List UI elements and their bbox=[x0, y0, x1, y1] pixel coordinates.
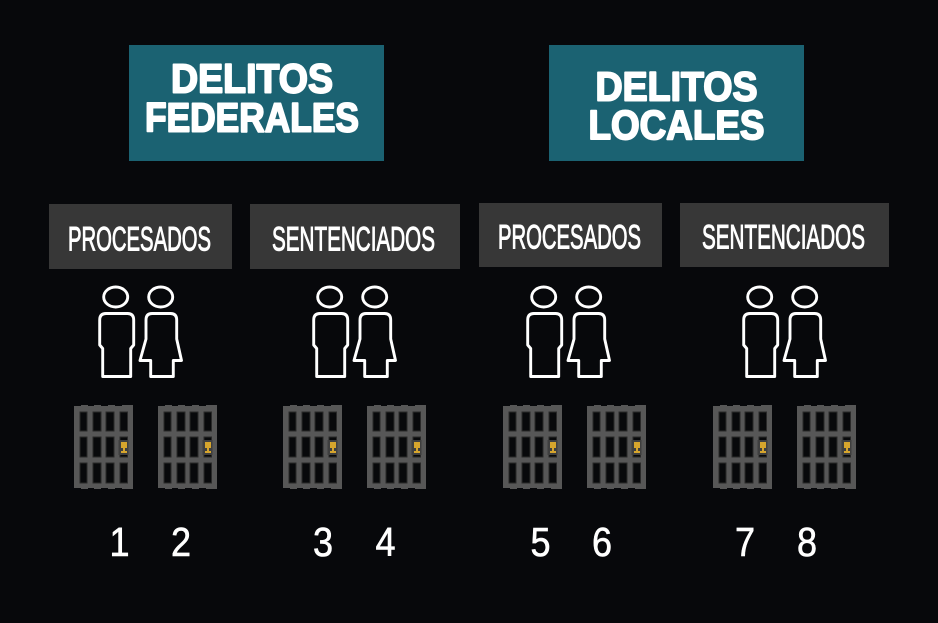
icon: cell door 5 bbox=[503, 405, 562, 489]
number 3: 3 bbox=[313, 520, 333, 566]
number 2: 2 bbox=[171, 520, 191, 566]
label: sentenciados federales: SENTENCIADOS bbox=[272, 220, 435, 258]
icon: cell door 1 bbox=[74, 405, 133, 489]
heading: delitos federales bbox=[129, 45, 384, 161]
icon: man and woman, group 3 bbox=[528, 287, 610, 376]
label: procesados locales bbox=[479, 203, 662, 267]
label: procesados federales: PROCESADOS bbox=[68, 220, 211, 258]
icon: cell door 8 bbox=[797, 405, 856, 489]
icon: cell door 6 bbox=[587, 405, 646, 489]
label: sentenciados locales bbox=[680, 203, 889, 267]
icon: man and woman, group 1 bbox=[100, 287, 182, 376]
icon: cell door 2 bbox=[158, 405, 217, 489]
icon: cell door 7 bbox=[713, 405, 772, 489]
icon: cell door 4 bbox=[367, 405, 426, 489]
icon: cell door 3 bbox=[283, 405, 342, 489]
heading: delitos locales: DELITOS bbox=[596, 64, 758, 110]
number 8: 8 bbox=[797, 520, 817, 566]
number 7: 7 bbox=[735, 520, 755, 566]
label: procesados locales: PROCESADOS bbox=[498, 218, 641, 256]
icon: man and woman, group 2 bbox=[314, 287, 396, 376]
number 1: 1 bbox=[109, 520, 130, 566]
heading: delitos federales: FEDERALES bbox=[145, 94, 359, 140]
number 6: 6 bbox=[592, 520, 612, 566]
icon: man and woman, group 4 bbox=[744, 287, 826, 376]
number 5: 5 bbox=[530, 520, 551, 566]
heading: delitos federales: DELITOS bbox=[171, 56, 333, 102]
label: sentenciados federales bbox=[250, 204, 460, 269]
heading: delitos locales bbox=[549, 45, 804, 161]
heading: delitos locales: LOCALES bbox=[588, 102, 764, 148]
label: procesados federales bbox=[49, 204, 232, 269]
number 4: 4 bbox=[375, 520, 396, 566]
